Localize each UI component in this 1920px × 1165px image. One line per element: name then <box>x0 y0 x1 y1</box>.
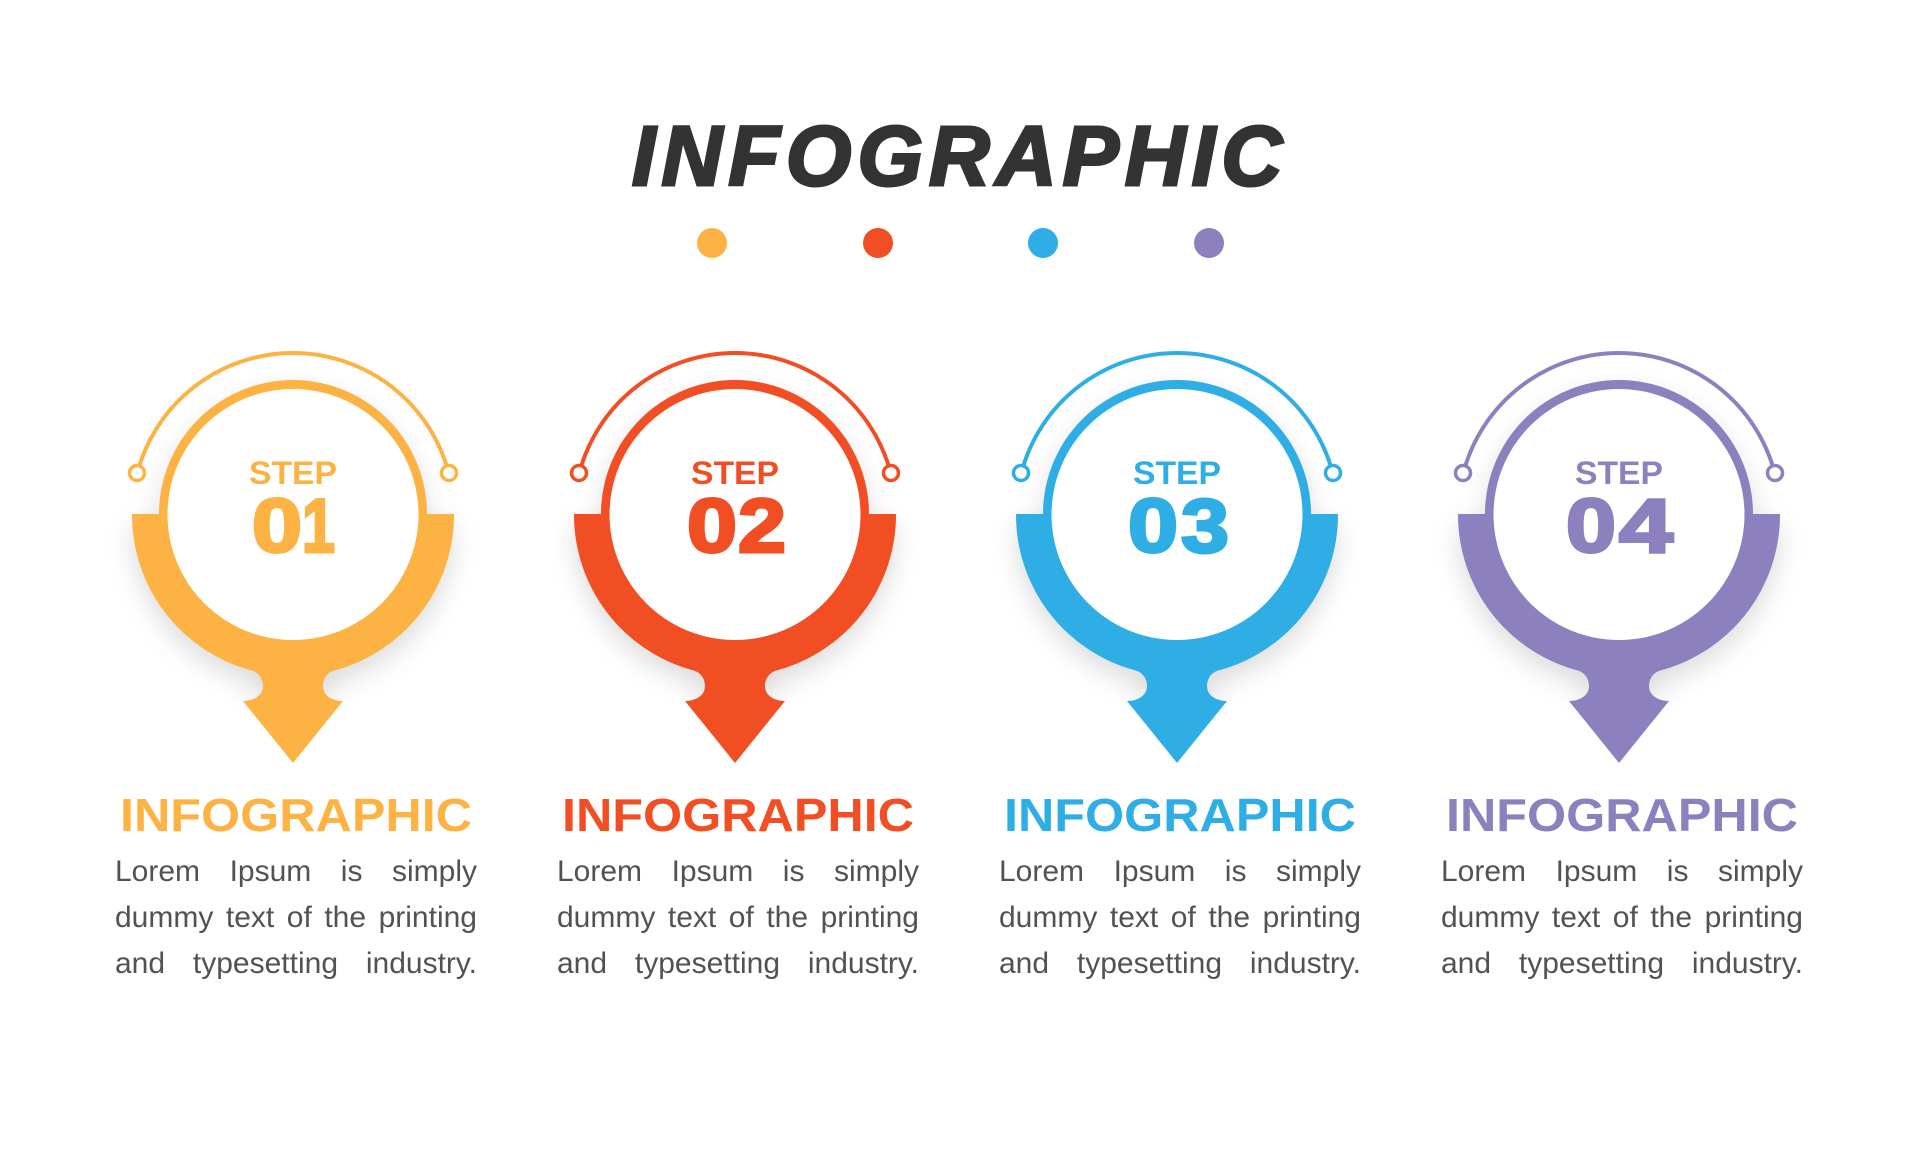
heading 04: INFOGRAPHIC <box>1446 789 1798 841</box>
pin graphic 02 <box>567 351 903 763</box>
heading 02: INFOGRAPHIC <box>562 789 914 841</box>
pin graphic 03 <box>1009 351 1345 763</box>
body text 04 <box>1441 855 1803 980</box>
panel: step 03 <box>999 351 1361 980</box>
panel: step 02 <box>557 351 919 980</box>
body text 04: dummy text of the printing <box>1441 901 1803 934</box>
body text 04: Lorem Ipsum is simply <box>1441 855 1803 888</box>
pin graphic 02: 2 <box>738 484 786 569</box>
pin graphic 03: STEP <box>1133 455 1221 491</box>
body text 03: Lorem Ipsum is simply <box>999 855 1361 888</box>
body text 03: dummy text of the printing <box>999 901 1361 934</box>
body text 02: dummy text of the printing <box>557 901 919 934</box>
panel: step 04 <box>1441 351 1803 980</box>
body text 01: Lorem Ipsum is simply <box>115 855 477 888</box>
pin graphic 01: STEP <box>249 455 337 491</box>
body text 01 <box>115 855 477 980</box>
body text 01: dummy text of the printing <box>115 901 477 934</box>
body text 03: and typesetting industry. <box>999 947 1361 980</box>
pin graphic 04: 4 <box>1619 484 1673 569</box>
body text 02 <box>557 855 919 980</box>
pin graphic 03: 3 <box>1181 484 1229 569</box>
pin graphic 04: STEP <box>1575 455 1663 491</box>
pin graphic 03: 0 <box>1128 484 1178 569</box>
panel: step 01 <box>115 351 477 980</box>
pin graphic 01: 1 <box>302 484 335 569</box>
title: INFOGRAPHIC <box>632 109 1283 203</box>
pin graphic 04: 0 <box>1566 484 1616 569</box>
body text 02: Lorem Ipsum is simply <box>557 855 919 888</box>
pin graphic 04 <box>1451 351 1787 763</box>
body text 02: and typesetting industry. <box>557 947 919 980</box>
body text 03 <box>999 855 1361 980</box>
heading 01: INFOGRAPHIC <box>120 789 472 841</box>
body text 01: and typesetting industry. <box>115 947 477 980</box>
pin graphic 02: 0 <box>687 484 737 569</box>
legend dots <box>697 228 1224 258</box>
body text 04: and typesetting industry. <box>1441 947 1803 980</box>
pin graphic 02: STEP <box>691 455 779 491</box>
heading 03: INFOGRAPHIC <box>1004 789 1356 841</box>
pin graphic 01: 0 <box>252 484 302 569</box>
pin graphic 01 <box>125 351 461 763</box>
